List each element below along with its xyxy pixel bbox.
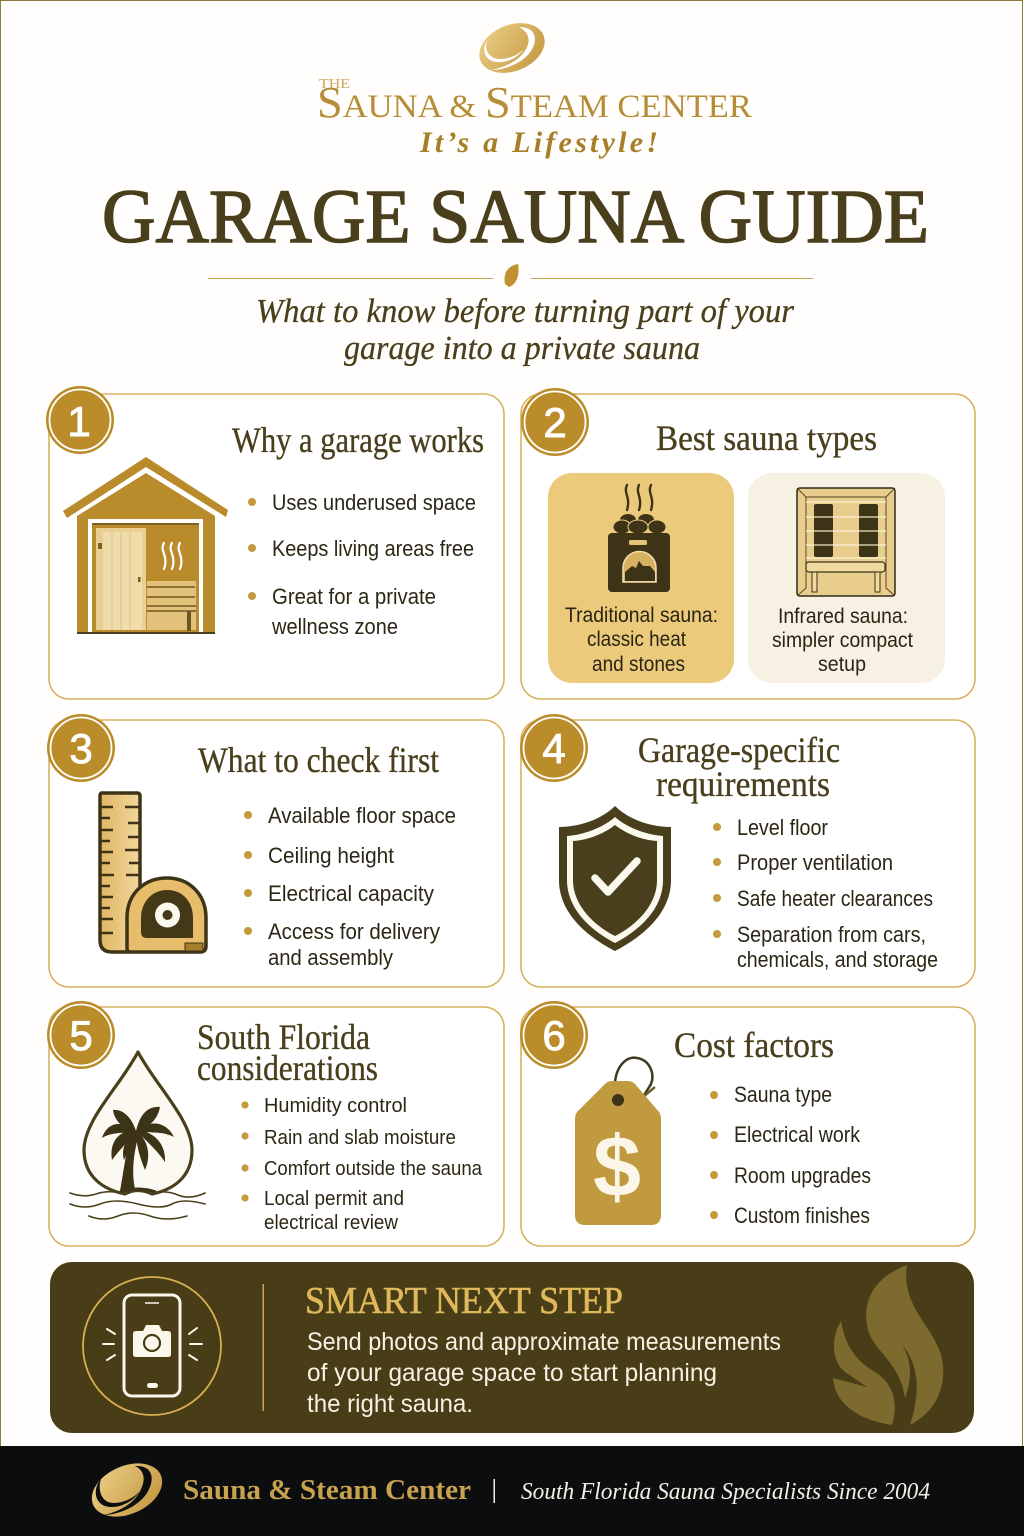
label <box>772 605 913 676</box>
subtitle <box>256 293 795 367</box>
heading: Garage-specific <box>638 730 840 770</box>
icon: ruler and tape measure <box>100 793 206 952</box>
bullet list <box>244 803 456 970</box>
brand name: SAUNA & STEAM CENTER <box>317 78 752 127</box>
body text <box>307 1328 781 1418</box>
bullet list: wellness zone <box>271 614 398 639</box>
callout: smart next step <box>50 1262 974 1433</box>
tagline: South Florida Sauna Specialists Since 2004 <box>521 1479 930 1505</box>
bullet list: chemicals, and storage <box>737 947 938 972</box>
icon: flame watermark <box>833 1265 943 1425</box>
badge 3 <box>47 714 115 782</box>
bullet list <box>710 1082 871 1228</box>
logo: footer brand mark <box>83 1453 171 1527</box>
heading: Best sauna types <box>656 418 877 458</box>
icon: price tag <box>575 1058 661 1225</box>
heading: requirements <box>656 764 830 804</box>
bullet list: Level floor <box>737 815 828 840</box>
subtitle: What to know before turning part of your <box>256 293 795 330</box>
heading <box>638 730 840 804</box>
badge 3: 3 <box>69 725 93 772</box>
bullet list: Room upgrades <box>734 1163 871 1188</box>
brand name: Sauna & Steam Center <box>183 1474 471 1506</box>
bullet list: Uses underused space <box>272 490 476 515</box>
title: GARAGE SAUNA GUIDE <box>102 175 929 259</box>
heading: SMART NEXT STEP <box>305 1280 623 1322</box>
icon: water drop with palm <box>70 1052 205 1219</box>
panel: why a garage works <box>46 386 504 699</box>
bullet list: Great for a private <box>272 584 436 609</box>
bullet list: Safe heater clearances <box>737 886 933 911</box>
body text: Send photos and approximate measurements <box>307 1328 781 1356</box>
bullet list <box>248 490 476 639</box>
bullet list: Ceiling height <box>268 843 394 868</box>
badge 4 <box>520 714 588 782</box>
label: simpler compact <box>772 629 913 652</box>
bullet list: Available floor space <box>268 803 456 828</box>
bullet list: Electrical capacity <box>268 881 434 906</box>
card: infrared sauna <box>748 473 945 683</box>
heading: Cost factors <box>674 1025 834 1065</box>
heading: What to check first <box>198 740 439 780</box>
heading: South Florida <box>197 1017 370 1057</box>
subtitle: garage into a private sauna <box>344 330 700 367</box>
bullet list <box>241 1095 483 1234</box>
bullet list: Humidity control <box>264 1095 407 1117</box>
badge 6 <box>520 1001 588 1069</box>
bullet list: Access for delivery <box>268 919 440 944</box>
body text: the right sauna. <box>307 1390 473 1418</box>
tagline: It’s a Lifestyle! <box>419 126 658 159</box>
panel: best sauna types <box>521 388 975 699</box>
bullet list: Sauna type <box>734 1082 832 1107</box>
bullet list: Separation from cars, <box>737 922 926 947</box>
bullet list: Custom finishes <box>734 1203 870 1228</box>
icon: divider leaf <box>505 264 519 287</box>
icon: price tag: $ <box>593 1119 641 1215</box>
card: traditional sauna <box>548 473 734 683</box>
heading <box>197 1017 378 1088</box>
icon: shield with check <box>559 806 671 951</box>
label: classic heat <box>587 628 686 651</box>
bullet list <box>713 815 938 972</box>
label: and stones <box>592 653 685 676</box>
label: setup <box>818 653 866 676</box>
bullet list: electrical review <box>264 1212 399 1234</box>
logo: top brand mark <box>472 14 552 82</box>
bullet list: Rain and slab moisture <box>264 1127 456 1149</box>
label: Infrared sauna: <box>778 605 908 628</box>
badge 5 <box>47 1001 115 1069</box>
badge 6: 6 <box>542 1012 566 1059</box>
label <box>565 604 718 676</box>
body text: of your garage space to start planning <box>307 1359 717 1387</box>
label: Traditional sauna: <box>565 604 718 627</box>
bullet list: Comfort outside the sauna <box>264 1158 483 1180</box>
brand name: THE <box>319 77 350 92</box>
footer bar <box>0 1446 1024 1536</box>
badge 2 <box>521 388 589 456</box>
heading: Why a garage works <box>232 420 484 460</box>
icon: phone camera <box>83 1277 221 1415</box>
heading: considerations <box>197 1048 378 1088</box>
bullet list: Electrical work <box>734 1122 861 1147</box>
badge 1: 1 <box>67 398 91 445</box>
bullet list: Proper ventilation <box>737 850 893 875</box>
panel: what to check first <box>47 714 504 987</box>
badge 5: 5 <box>69 1012 93 1059</box>
icon: sauna heater <box>608 485 670 592</box>
bullet list: Keeps living areas free <box>272 536 474 561</box>
bullet list: and assembly <box>268 945 393 970</box>
icon: infrared cabin <box>797 488 895 596</box>
panel: south florida considerations <box>47 1001 504 1246</box>
icon: garage sauna house <box>63 457 228 634</box>
badge 1 <box>46 386 114 454</box>
panel: garage-specific requirements <box>520 714 975 987</box>
bullet list: Local permit and <box>264 1188 404 1210</box>
badge 2: 2 <box>543 399 567 446</box>
panel: cost factors <box>520 1001 975 1246</box>
badge 4: 4 <box>542 725 566 772</box>
